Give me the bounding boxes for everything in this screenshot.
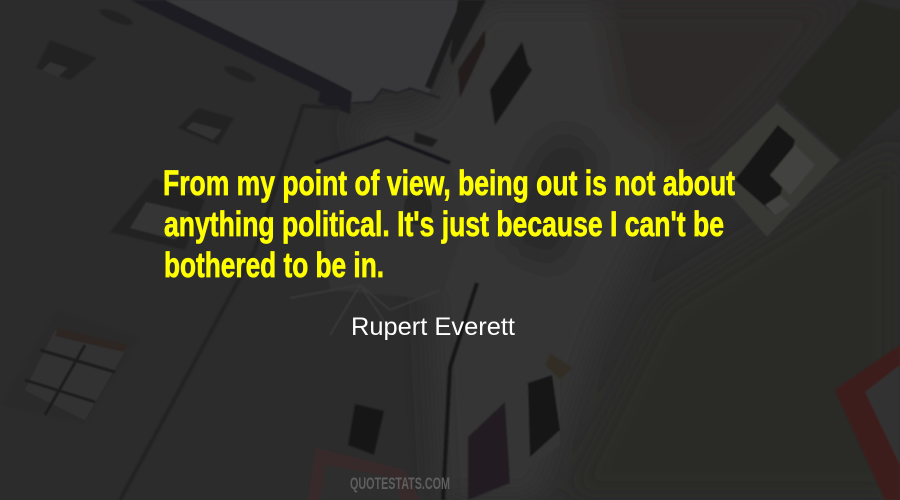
oval vents — [97, 6, 135, 28]
lower central opening — [348, 404, 384, 455]
quote text: bothered to be in. — [164, 246, 384, 285]
quote text — [163, 164, 735, 285]
upper centre window — [178, 108, 234, 145]
upper central windows — [450, 0, 486, 65]
top right dark panel — [777, 0, 900, 160]
red window lower right — [835, 345, 900, 500]
vault ribs — [290, 285, 440, 335]
soft wall tones — [350, 0, 900, 500]
long vertical drain — [443, 283, 477, 500]
upper right window — [708, 103, 840, 237]
quote text: From my point of view, being out is not about — [163, 164, 735, 203]
lower left window — [0, 310, 140, 425]
window beside quote — [110, 178, 205, 250]
red window lower centre — [308, 448, 420, 500]
quote text: anything political. It's just because I can't be — [164, 205, 724, 244]
author: Rupert Everett — [351, 313, 515, 341]
drain pipe — [120, 106, 340, 500]
watermark: QUOTESTATS.COM — [350, 474, 450, 493]
roof edge — [130, 0, 352, 114]
upper left window — [36, 40, 97, 80]
lower window — [505, 365, 560, 483]
sky — [135, 0, 470, 103]
bay roof — [315, 140, 470, 300]
